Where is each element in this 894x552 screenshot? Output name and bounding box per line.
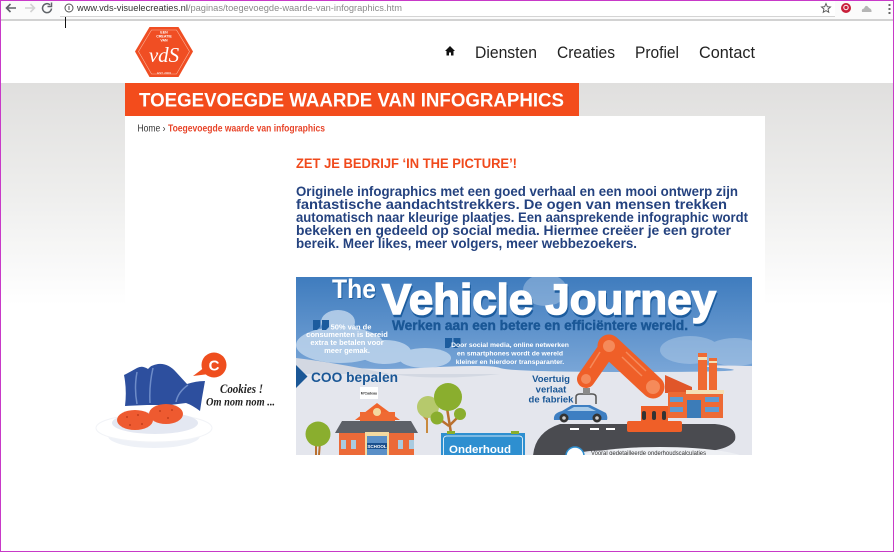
logo: vdS <box>149 43 180 67</box>
intro text block: automatisch naar kleurige plaatjes. Een aansprekende infographic wordt <box>296 209 748 225</box>
browser toolbar <box>0 0 894 28</box>
voertuig label: verlaat <box>536 384 567 396</box>
icon: home <box>445 46 455 56</box>
logo: CREATIE <box>156 34 172 38</box>
icon: cloud extension <box>862 6 872 12</box>
trees <box>306 383 466 455</box>
icon: menu dots <box>888 4 890 14</box>
quote: comfort: consumenten is bereid <box>306 330 388 339</box>
quote: social media: en smartphones wordt de wereld <box>457 350 563 358</box>
cookies <box>117 404 183 430</box>
voertuig label: Voertuig <box>532 374 570 385</box>
coo label: COO bepalen <box>311 369 398 385</box>
school building <box>335 403 418 456</box>
icon: pinterest <box>841 3 851 13</box>
c badge: C <box>209 358 220 374</box>
title: The: The <box>333 275 377 305</box>
cookies caption <box>206 381 275 408</box>
quote: social media: kleiner en hierdoor transparanter. <box>456 359 564 366</box>
nav: Profiel: Profiel <box>635 43 679 62</box>
cookie illustration <box>96 352 275 448</box>
logo: EEN <box>160 30 168 34</box>
quote: comfort: 50% van de <box>331 322 371 332</box>
icon: reload <box>43 2 52 13</box>
car <box>554 405 607 422</box>
url: www.vds-visuelecreaties.nl /paginas/toegevoegde-waarde-van-infographics.htm <box>76 3 402 13</box>
c badge <box>193 352 226 378</box>
heading: ZET JE BEDRIJF ‘IN THE PICTURE’! <box>296 155 517 171</box>
quote: social media: Door social media, online netwerken <box>451 342 569 349</box>
road <box>533 424 735 456</box>
voertuig label: de fabriek <box>529 394 574 406</box>
factory <box>665 353 724 418</box>
nav: Contact: Contact <box>699 43 755 62</box>
logo <box>135 27 193 77</box>
cookies caption: Om nom nom ... <box>206 394 275 408</box>
plate <box>96 412 212 448</box>
icon: forward arrow <box>25 4 34 12</box>
ground hills <box>296 360 752 455</box>
onderhoud sign <box>441 431 525 455</box>
intro text block: Originele infographics met een goed verhaal en een mooi ontwerp zijn <box>296 183 738 199</box>
navigation menu <box>445 43 755 62</box>
title: The: The <box>332 274 376 304</box>
subtitle: Werken aan een betere en efficiëntere wereld. <box>392 318 688 333</box>
title: Vehicle Journey: Vehicle Journey <box>383 278 717 326</box>
school building: SCHOOL <box>367 444 387 449</box>
icon: site info <box>65 4 73 12</box>
section arrow <box>296 365 308 388</box>
title: Vehicle Journey: Vehicle Journey <box>382 276 716 324</box>
icon: star <box>822 4 830 12</box>
badge <box>360 387 378 399</box>
cookies caption: Cookies ! <box>220 381 263 396</box>
intro text block: bekeken en gedeeld op social media. Hiermee creëer je een groter <box>296 222 732 238</box>
logo: VAN <box>160 38 168 42</box>
nav: Diensten: Diensten <box>475 43 537 62</box>
quote: comfort <box>306 320 388 355</box>
robot arm <box>576 340 682 432</box>
bottom info row: Vooral gedetailleerde onderhoudscalculaties <box>591 450 707 457</box>
blue hand <box>124 364 205 411</box>
intro text block: fantastische aandachtstrekkers. De ogen van mensen trekken <box>296 196 727 212</box>
clouds <box>296 274 765 368</box>
quote: comfort: extra te betalen voor <box>310 338 384 347</box>
quote: social media <box>445 338 569 366</box>
page title banner: TOEGEVOEGDE WAARDE VAN INFOGRAPHICS <box>139 90 564 112</box>
infographic: the vehicle journey <box>296 277 752 455</box>
onderhoud sign: Onderhoud <box>449 444 511 456</box>
icon: back arrow <box>6 4 16 12</box>
badge: M'Cadeau <box>361 392 377 396</box>
voertuig label <box>528 376 574 402</box>
page title banner <box>125 83 579 116</box>
icon: text cursor <box>65 17 66 28</box>
bottom info row <box>565 446 738 455</box>
nav: Creaties: Creaties <box>557 43 615 62</box>
breadcrumb: Home › <box>138 124 166 134</box>
title: The <box>332 278 376 300</box>
intro text block: bereik. Meer likes, meer volgers, meer webbezoekers. <box>296 235 637 251</box>
breadcrumb: Toegevoegde waarde van infographics <box>168 124 325 134</box>
quote: comfort: meer gemak. <box>324 346 370 355</box>
intro text block <box>296 183 748 251</box>
logo: EST. 2003 <box>157 71 171 75</box>
